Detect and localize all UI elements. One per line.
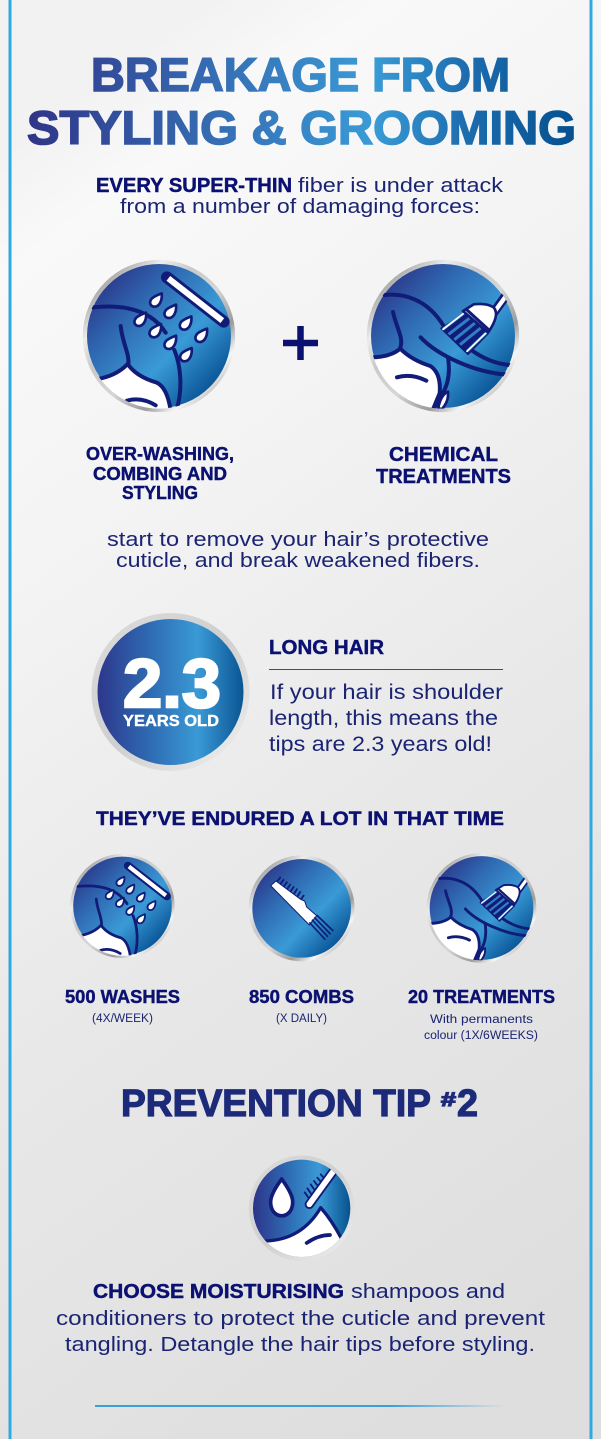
stat: 850 combs bbox=[249, 986, 354, 1025]
label: chemical treatments bbox=[376, 444, 511, 488]
tip text: CHOOSE MOISTURISING bbox=[93, 1281, 344, 1303]
intro text: from a number of damaging forces: bbox=[120, 196, 480, 218]
badge: 2.3 years old bbox=[94, 616, 246, 768]
label: over-washing, combing and styling bbox=[86, 443, 234, 503]
label: over-washing, combing and styling: STYLING bbox=[122, 482, 198, 503]
right border line bbox=[590, 0, 592, 1439]
icon: dye brush on hair bbox=[369, 262, 517, 413]
badge: 2.3 years old: 2.3 bbox=[123, 645, 221, 722]
stat: 20 treatments bbox=[408, 986, 555, 1042]
label: chemical treatments: TREATMENTS bbox=[376, 466, 511, 488]
title bbox=[27, 48, 576, 154]
cuticle text: cuticle, and break weakened fibers. bbox=[116, 550, 480, 572]
stat: 20 treatments: 20 TREATMENTS bbox=[408, 986, 555, 1007]
tip text: conditioners to protect the cuticle and prevent bbox=[56, 1308, 546, 1330]
intro text bbox=[96, 175, 504, 218]
stat: 850 combs: (X DAILY) bbox=[276, 1013, 327, 1025]
tip text bbox=[56, 1281, 546, 1356]
badge: 2.3 years old: YEARS OLD bbox=[123, 713, 219, 730]
left border line bbox=[8, 0, 12, 1439]
cuticle text bbox=[107, 529, 489, 572]
label: over-washing, combing and styling: COMBING AND bbox=[93, 463, 227, 484]
stat: 500 washes bbox=[65, 986, 180, 1025]
heading: prevention tip: PREVENTION TIP bbox=[121, 1083, 431, 1125]
long hair text bbox=[269, 681, 503, 756]
icon: small shower bbox=[72, 855, 173, 959]
icon: comb bbox=[251, 857, 353, 959]
icon: shower over hair bbox=[85, 262, 233, 413]
subheading: endured: THEY’VE ENDURED A LOT IN THAT TIME bbox=[96, 808, 504, 830]
icon: moisture drop and comb bbox=[250, 1158, 352, 1262]
heading: prevention tip: 2 bbox=[457, 1083, 478, 1125]
icon: small dye brush bbox=[428, 855, 535, 964]
long hair text: length, this means the bbox=[269, 707, 498, 730]
stat: 850 combs: 850 COMBS bbox=[249, 986, 354, 1007]
label: over-washing, combing and styling: OVER-WASHING, bbox=[86, 443, 234, 464]
bottom divider brush line bbox=[95, 1405, 505, 1407]
heading: prevention tip: # bbox=[441, 1090, 457, 1111]
long hair text: If your hair is shoulder bbox=[270, 681, 503, 704]
stat: 500 washes: (4X/WEEK) bbox=[92, 1013, 153, 1025]
title: BREAKAGE FROM bbox=[91, 48, 510, 101]
tip text: tangling. Detangle the hair tips before styling. bbox=[65, 1334, 535, 1356]
stat: 500 washes: 500 WASHES bbox=[65, 986, 180, 1007]
tip text: shampoos and bbox=[351, 1281, 505, 1303]
long hair heading: LONG HAIR bbox=[269, 637, 385, 659]
label: chemical treatments: CHEMICAL bbox=[389, 444, 498, 466]
title: STYLING & GROOMING bbox=[27, 101, 576, 154]
stat: 20 treatments: With permanents bbox=[430, 1014, 533, 1026]
icon: plus sign bbox=[283, 326, 318, 360]
intro text: EVERY SUPER-THIN bbox=[96, 175, 292, 197]
stat: 20 treatments: colour (1X/6WEEKS) bbox=[424, 1030, 538, 1042]
cuticle text: start to remove your hair’s protective bbox=[107, 529, 489, 551]
intro text: fiber is under attack bbox=[298, 175, 504, 197]
long hair text: tips are 2.3 years old! bbox=[269, 733, 492, 756]
